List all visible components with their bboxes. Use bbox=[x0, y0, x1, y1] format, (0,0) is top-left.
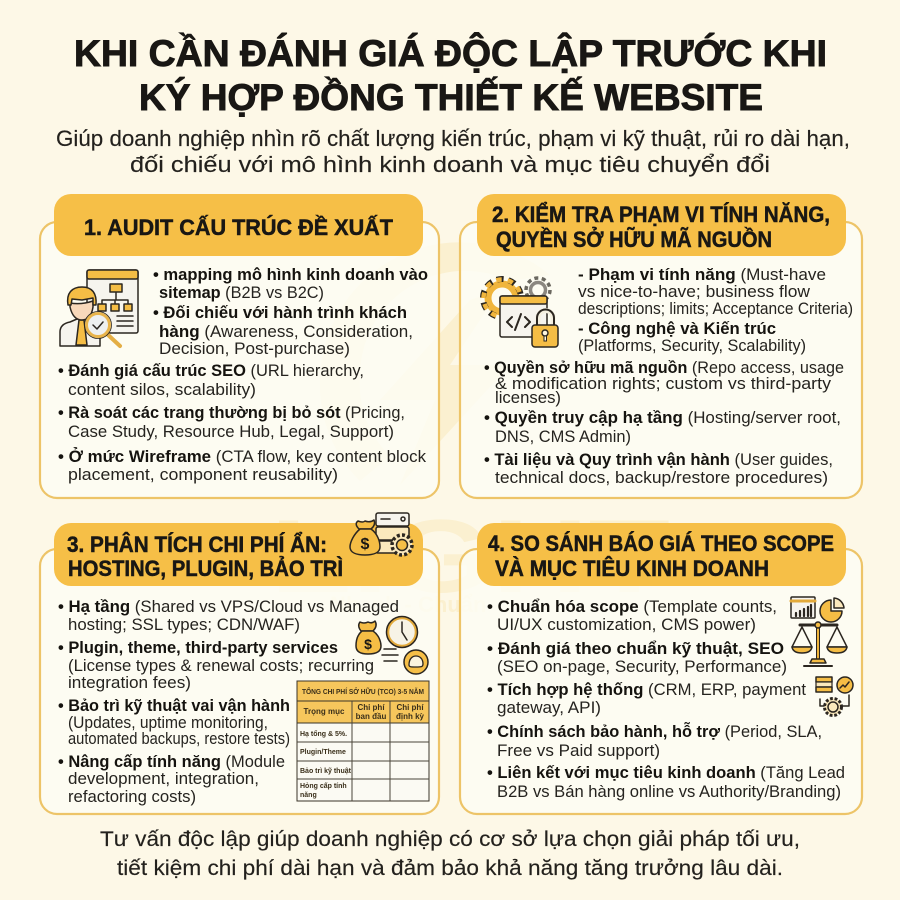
text block: panel 1 bullets: content silos, scalability) bbox=[68, 381, 256, 399]
text block: panel 3 bullets: • Hạ tầng (Shared vs VPS/Cloud vs Managed bbox=[58, 598, 399, 616]
panel: audit cấu trúc đề xuất bbox=[40, 194, 439, 498]
title bbox=[74, 32, 827, 118]
table: tổng chi phí sở hữu: Hạ tổng & 5%. bbox=[300, 730, 347, 738]
text block: panel 3 bullets: • Plugin, theme, third-party services bbox=[58, 639, 338, 657]
text block: panel 2 bullets: - Công nghệ và Kiến trúc bbox=[578, 320, 776, 338]
text block: panel 3 bullets: • Nâng cấp tính năng (Module bbox=[58, 753, 285, 771]
text block: panel 4 bullets: gateway, API) bbox=[497, 699, 601, 717]
text block: panel 4 bullets: • Tích hợp hệ thống (CRM, ERP, payment bbox=[487, 681, 806, 699]
text block: panel 1 bullets: • Ở mức Wireframe (CTA flow, key content block bbox=[58, 447, 427, 466]
icon: money bag, server and gear: $ bbox=[361, 536, 370, 553]
table: tổng chi phí sở hữu: Chi phí bbox=[357, 703, 385, 712]
icon: balance scale bbox=[792, 622, 847, 666]
text block: panel 1 bullets bbox=[58, 266, 428, 484]
icon: system integration bbox=[816, 677, 853, 716]
text block: panel 1 bullets: • Đối chiếu với hành trình khách bbox=[153, 304, 407, 322]
title: KÝ HỢP ĐỒNG THIẾT KẾ WEBSITE bbox=[139, 76, 763, 118]
text block: panel 2 bullets: - Phạm vi tính năng (Must-have bbox=[578, 266, 826, 284]
footer message bbox=[100, 828, 800, 880]
heading: panel 3: 3. PHÂN TÍCH CHI PHÍ ẨN: bbox=[67, 532, 327, 557]
heading: panel 1 bbox=[54, 194, 423, 256]
text block: panel 4 bullets bbox=[487, 598, 845, 801]
watermark: brand emblem bbox=[270, 242, 670, 617]
watermark: brand emblem: Nhanh - Chuẩn bbox=[330, 592, 486, 617]
icon: money bag, clock and coin: $ bbox=[364, 636, 372, 652]
icon: money bag, server and gear bbox=[350, 513, 412, 555]
text block: panel 2 bullets: licenses) bbox=[495, 389, 561, 407]
text block: panel 3 bullets: development, integration, bbox=[68, 770, 259, 788]
heading: panel 3 bbox=[54, 523, 423, 586]
heading: panel 4: VÀ MỤC TIÊU KINH DOANH bbox=[495, 556, 769, 581]
text block: panel 2 bullets: DNS, CMS Admin) bbox=[495, 428, 631, 446]
table: tổng chi phí sở hữu bbox=[297, 681, 429, 801]
text block: panel 1 bullets: placement, component reusability) bbox=[68, 466, 338, 484]
text block: panel 2 bullets bbox=[484, 266, 853, 487]
table: tổng chi phí sở hữu: Trọng mục bbox=[304, 707, 345, 716]
text block: panel 2 bullets: & modification rights; custom vs third-party bbox=[495, 375, 832, 393]
text block: panel 3 bullets bbox=[58, 598, 399, 806]
text block: panel 4 bullets: UI/UX customization, CMS power) bbox=[497, 616, 756, 634]
table: tổng chi phí sở hữu: định kỳ bbox=[396, 712, 425, 721]
text block: panel 2 bullets: • Tài liệu và Quy trình vận hành (User guides, bbox=[484, 451, 833, 469]
text block: panel 4 bullets: • Chuẩn hóa scope (Template counts, bbox=[487, 598, 777, 616]
heading: panel 2 bbox=[477, 194, 846, 256]
text block: panel 1 bullets: • mapping mô hình kinh doanh vào bbox=[153, 266, 428, 284]
panel: phân tích chi phí ẩn bbox=[40, 513, 439, 814]
text block: panel 2 bullets: • Quyền truy cập hạ tầng (Hosting/server root, bbox=[484, 409, 841, 427]
text block: panel 1 bullets: hàng (Awareness, Consideration, bbox=[159, 323, 413, 341]
text block: panel 1 bullets: Decision, Post-purchase) bbox=[159, 340, 350, 358]
text block: panel 3 bullets: (License types & renewal costs; recurring bbox=[68, 657, 374, 675]
table: tổng chi phí sở hữu: Chi phí bbox=[396, 703, 424, 712]
table: tổng chi phí sở hữu: Bảo trì kỹ thuật bbox=[300, 768, 352, 775]
text block: panel 3 bullets: (Updates, uptime monitoring, bbox=[68, 714, 268, 732]
icon: money bag, clock and coin bbox=[356, 616, 428, 674]
text block: panel 1 bullets: Case Study, Resource Hub, Legal, Support) bbox=[68, 423, 394, 441]
panel: kiểm tra phạm vi tính năng bbox=[460, 194, 862, 498]
table: tổng chi phí sở hữu: Hỏng cấp tính bbox=[300, 782, 347, 790]
subtitle bbox=[56, 126, 850, 177]
heading: panel 4 bbox=[477, 523, 846, 586]
icon: dashboard chart and pie bbox=[791, 597, 844, 622]
text block: panel 2 bullets: technical docs, backup/restore procedures) bbox=[495, 469, 828, 487]
text block: panel 2 bullets: (Platforms, Security, Scalability) bbox=[578, 337, 806, 355]
text block: panel 2 bullets: descriptions; limits; Acceptance Criteria) bbox=[578, 300, 853, 318]
heading: panel 3: HOSTING, PLUGIN, BẢO TRÌ bbox=[68, 556, 343, 581]
text block: panel 4 bullets: • Chính sách bảo hành, hỗ trợ (Period, SLA, bbox=[487, 722, 822, 741]
watermark: brand emblem: LIGHT bbox=[270, 499, 670, 615]
table: tổng chi phí sở hữu: năng bbox=[300, 792, 317, 799]
icon: code window, gears and padlock bbox=[483, 278, 558, 347]
text block: panel 4 bullets: • Liên kết với mục tiêu kinh doanh (Tăng Lead bbox=[487, 764, 845, 782]
subtitle: Giúp doanh nghiệp nhìn rõ chất lượng kiến trúc, phạm vi kỹ thuật, rủi ro dài hạn, bbox=[56, 126, 850, 151]
table: tổng chi phí sở hữu: Plugin/Theme bbox=[300, 749, 346, 756]
text block: panel 2 bullets: vs nice-to-have; business flow bbox=[578, 283, 810, 301]
text block: panel 1 bullets: • Rà soát các trang thường bị bỏ sót (Pricing, bbox=[58, 404, 405, 422]
heading: panel 2: 2. KIỂM TRA PHẠM VI TÍNH NĂNG, bbox=[492, 202, 830, 227]
table: tổng chi phí sở hữu: ban đầu bbox=[356, 712, 386, 721]
text block: panel 3 bullets: refactoring costs) bbox=[68, 788, 196, 806]
footer message: tiết kiệm chi phí dài hạn và đảm bảo khả năng tăng trưởng lâu dài. bbox=[117, 857, 783, 880]
text block: panel 3 bullets: automated backups, restore tests) bbox=[68, 730, 290, 748]
footer message: Tư vấn độc lập giúp doanh nghiệp có cơ sở lựa chọn giải pháp tối ưu, bbox=[100, 828, 800, 851]
text block: panel 4 bullets: Free vs Paid support) bbox=[497, 742, 660, 760]
text block: panel 1 bullets: sitemap (B2B vs B2C) bbox=[159, 284, 324, 302]
panel: so sánh báo giá bbox=[460, 523, 862, 814]
text block: panel 4 bullets: B2B vs Bán hàng online vs Authority/Branding) bbox=[497, 783, 841, 801]
text block: panel 4 bullets: • Đánh giá theo chuẩn kỹ thuật, SEO bbox=[487, 640, 784, 658]
heading: panel 4: 4. SO SÁNH BÁO GIÁ THEO SCOPE bbox=[488, 531, 834, 556]
text block: panel 3 bullets: integration fees) bbox=[68, 674, 191, 692]
heading: panel 2: QUYỀN SỞ HỮU MÃ NGUỒN bbox=[496, 227, 772, 252]
table: tổng chi phí sở hữu: TỔNG CHI PHÍ SỞ HỮU (TCO) 3-5 NĂM bbox=[302, 687, 424, 696]
text block: panel 3 bullets: • Bảo trì kỹ thuật vai vận hành bbox=[58, 697, 290, 715]
text block: panel 3 bullets: hosting; SSL types; CDN/WAF) bbox=[68, 616, 300, 634]
subtitle: đối chiếu với mô hình kinh doanh và mục tiêu chuyển đổi bbox=[130, 152, 770, 177]
text block: panel 1 bullets: • Đánh giá cấu trúc SEO (URL hierarchy, bbox=[58, 362, 364, 380]
heading: panel 1: 1. AUDIT CẤU TRÚC ĐỀ XUẤT bbox=[84, 215, 394, 240]
icon: consultant reviewing sitemap bbox=[60, 270, 138, 346]
text block: panel 2 bullets: • Quyền sở hữu mã nguồn (Repo access, usage bbox=[484, 359, 844, 377]
title: KHI CẦN ĐÁNH GIÁ ĐỘC LẬP TRƯỚC KHI bbox=[74, 32, 827, 74]
text block: panel 4 bullets: (SEO on-page, Security, Performance) bbox=[497, 658, 787, 676]
